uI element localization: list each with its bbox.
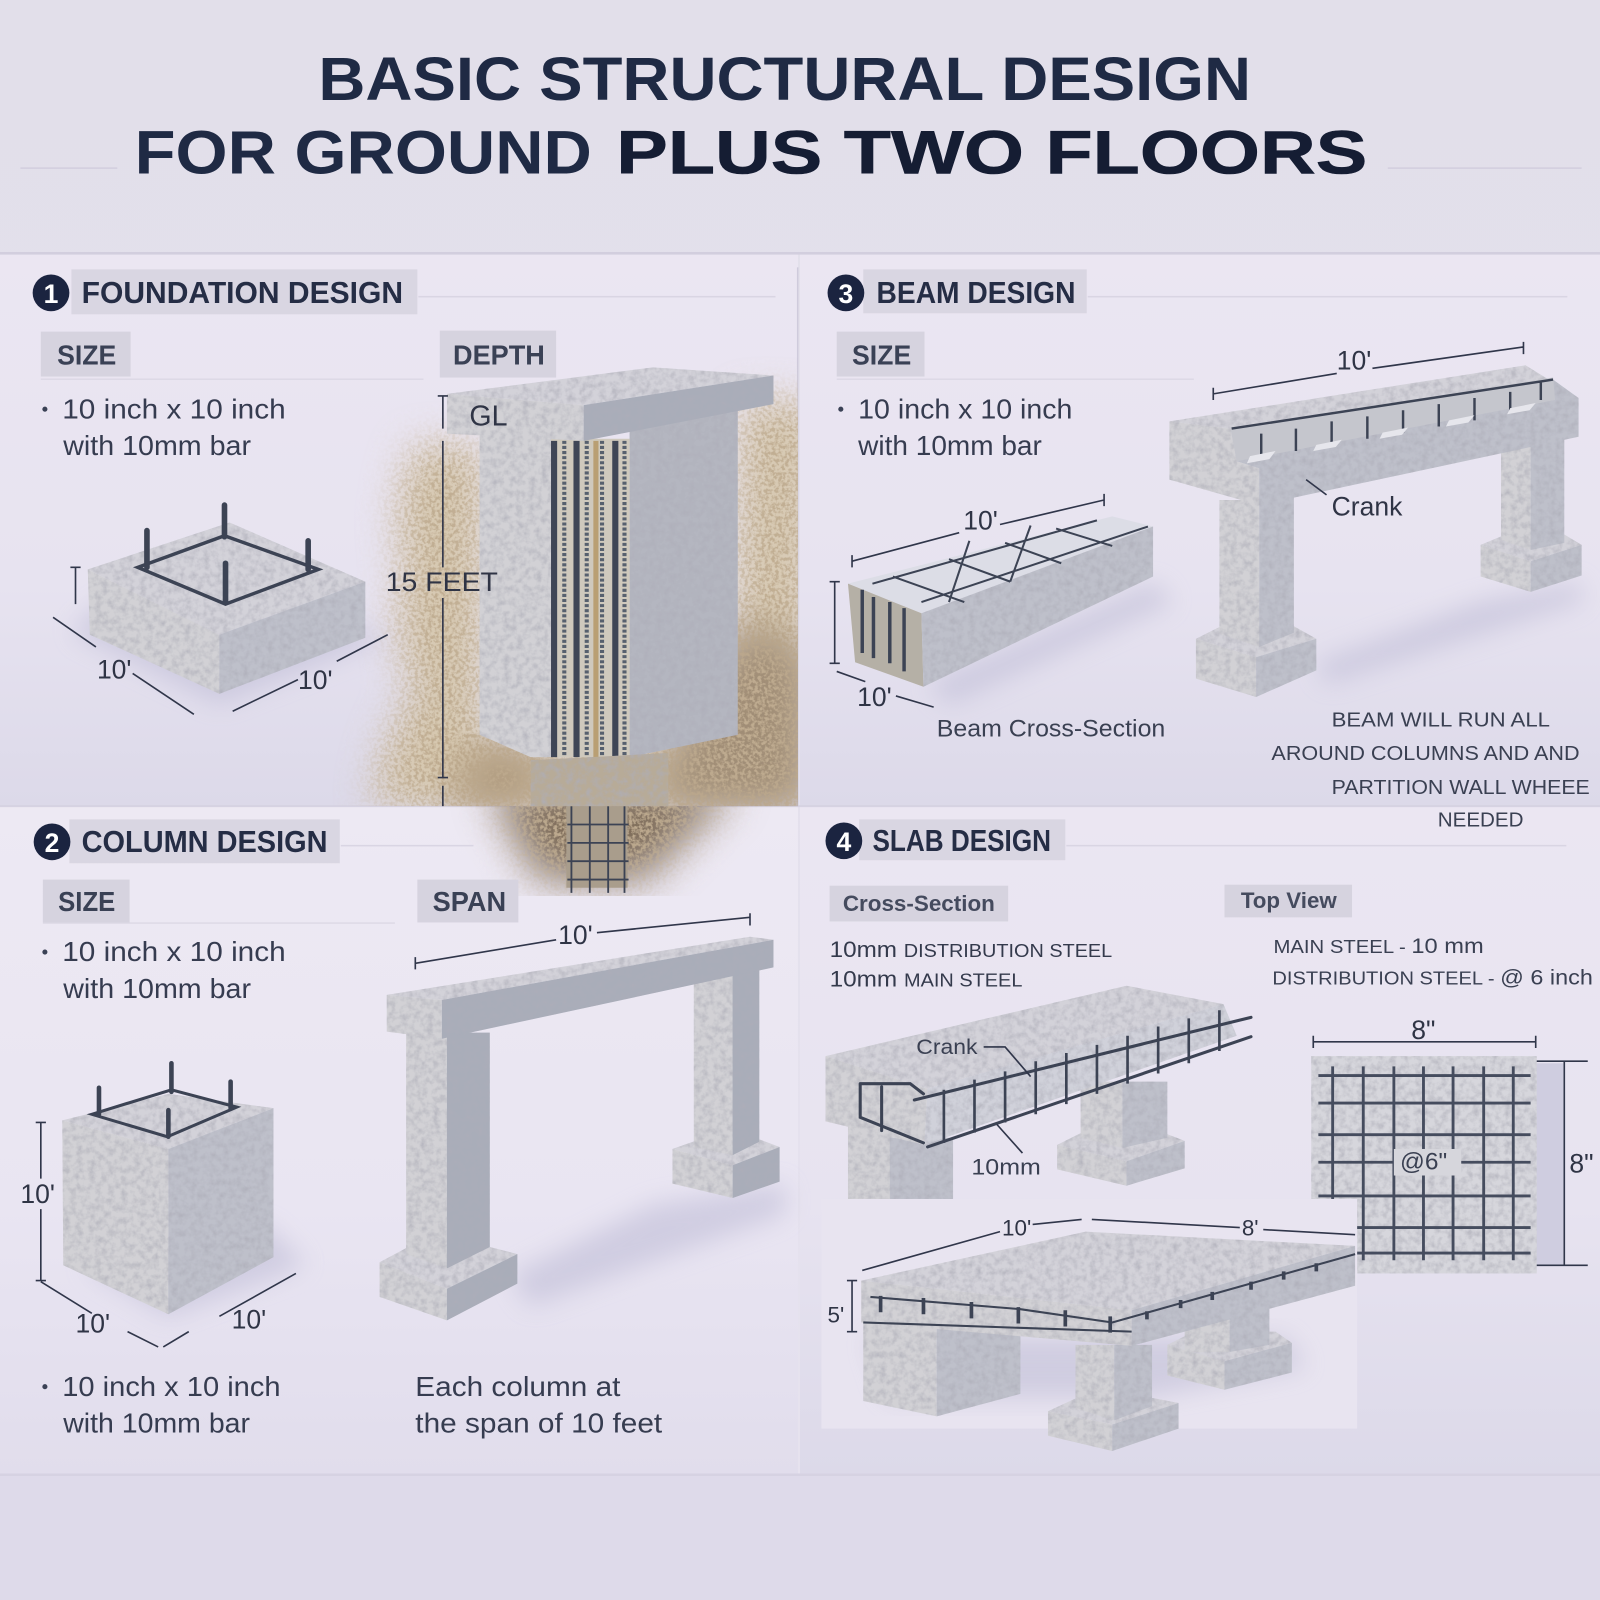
text: size spec <box>838 393 1072 461</box>
label: size: SIZE <box>58 886 115 917</box>
text: beam note: NEEDED <box>1438 810 1523 832</box>
label: size <box>43 880 395 924</box>
dimension: footing <box>53 567 388 714</box>
heading: beam design: BEAM DESIGN <box>877 276 1076 310</box>
text: beam note <box>1271 710 1590 832</box>
dimension: beam cross-section: 10' <box>857 682 892 712</box>
dimension: beam cross-section <box>830 494 1104 712</box>
dimension: column block: 10' <box>20 1179 55 1209</box>
text: beam note: BEAM WILL RUN ALL <box>1332 710 1550 732</box>
text: lower size spec: 10 inch x 10 inch <box>62 1371 281 1402</box>
text: top view spec: MAIN STEEL - 10 mm <box>1273 934 1484 958</box>
text: beam note: PARTITION WALL WHEEE <box>1332 777 1590 799</box>
text: size spec: with 10mm bar <box>62 973 251 1004</box>
heading: foundation design: 1 <box>44 279 59 309</box>
illustration: soil around column <box>378 403 816 806</box>
dimension: 15 feet depth: 15 FEET <box>386 567 498 597</box>
heading: beam design: 3 <box>839 279 853 309</box>
illustration: slab on columns <box>821 1199 1357 1451</box>
text: span note: Each column at <box>415 1371 621 1402</box>
illustration: beam frame <box>1169 365 1582 697</box>
dimension: beam span <box>1213 342 1523 521</box>
illustration: column in ground <box>447 367 773 806</box>
text: top view spec: DISTRIBUTION STEEL - @ 6 inch <box>1272 966 1593 990</box>
text: size spec <box>42 936 286 1004</box>
dimension: 15 feet depth <box>386 396 507 806</box>
dimension: beam cross-section: 10' <box>963 506 998 536</box>
text: size spec <box>42 393 286 461</box>
title: FOR GROUND <box>135 118 592 186</box>
label: cross-section: Cross-Section <box>843 891 995 916</box>
text: size spec: 10 inch x 10 inch <box>858 393 1072 424</box>
title: PLUS TWO FLOORS <box>616 118 1367 186</box>
heading: slab design: 4 <box>837 827 852 857</box>
dimension: beam span: 10' <box>1337 345 1371 375</box>
label: depth <box>440 331 556 378</box>
illustration: slab cross-section <box>826 986 1251 1199</box>
text: cross-section spec <box>830 937 1112 992</box>
heading: column design: COLUMN DESIGN <box>82 825 328 859</box>
title: BASIC STRUCTURAL DESIGN <box>318 45 1251 113</box>
label: span <box>417 880 518 922</box>
dimension: slab: 8' <box>1242 1216 1259 1241</box>
dimension: 15 feet depth: GL <box>469 401 507 433</box>
heading: foundation design: FOUNDATION DESIGN <box>82 276 403 310</box>
label: size: SIZE <box>852 339 911 370</box>
illustration: slab cross-section: 10mm <box>971 1154 1041 1179</box>
dimension: span <box>415 913 750 969</box>
dimension: column block: 10' <box>76 1309 110 1339</box>
illustration: reinforcement grid top view: @6" <box>1400 1148 1447 1175</box>
label: top view <box>1224 885 1352 917</box>
illustration: reinforcement grid top view: 8" <box>1411 1015 1435 1045</box>
heading: slab design <box>826 819 1566 860</box>
illustration: reinforcement grid top view: 8" <box>1569 1148 1594 1178</box>
heading: beam design <box>828 269 1567 313</box>
text: size spec: 10 inch x 10 inch <box>62 936 286 967</box>
text: span note <box>415 1371 663 1439</box>
label: depth: DEPTH <box>453 339 545 370</box>
text: span note: the span of 10 feet <box>415 1408 663 1439</box>
dimension: span: 10' <box>558 920 593 950</box>
panel: beam design <box>828 269 1590 832</box>
heading: slab design: SLAB DESIGN <box>872 824 1051 858</box>
text: cross-section spec: 10mm MAIN STEEL <box>830 967 1022 992</box>
heading: column design <box>34 819 473 863</box>
text: beam note: AROUND COLUMNS AND AND <box>1271 743 1580 765</box>
text: cross-section spec: 10mm DISTRIBUTION STEEL <box>830 937 1112 962</box>
heading: column design: 2 <box>45 828 59 858</box>
illustration: soil below panel edge <box>490 786 735 893</box>
dimension: slab <box>828 1216 1355 1332</box>
label: size <box>41 332 423 380</box>
dimension: slab: 10' <box>1002 1216 1031 1241</box>
text: size spec: with 10mm bar <box>857 430 1042 461</box>
illustration: column frame <box>380 937 786 1320</box>
panel: slab design <box>821 819 1594 1451</box>
label: span: SPAN <box>433 886 506 917</box>
text: lower size spec <box>42 1371 281 1439</box>
dimension: column block <box>20 1122 296 1347</box>
illustration: column block <box>62 1063 306 1316</box>
illustration: reinforcement grid top view <box>1311 1015 1594 1273</box>
dimension: footing: 10' <box>298 665 333 695</box>
title <box>135 45 1367 186</box>
illustration: slab cross-section: Crank <box>916 1035 978 1059</box>
label: size <box>837 332 1194 380</box>
dimension: beam span: Crank <box>1332 491 1403 521</box>
label: top view: Top View <box>1241 888 1337 913</box>
label: size: SIZE <box>57 339 116 370</box>
heading: foundation design <box>33 269 776 314</box>
text: size spec: 10 inch x 10 inch <box>62 393 286 424</box>
text: lower size spec: with 10mm bar <box>62 1408 250 1439</box>
panel: foundation design <box>33 269 816 893</box>
text: size spec: with 10mm bar <box>62 430 251 461</box>
dimension: footing: 10' <box>97 655 132 685</box>
label: cross-section <box>830 886 1008 921</box>
dimension: slab: 5' <box>828 1302 844 1327</box>
panel: column design <box>20 819 786 1439</box>
dimension: column block: 10' <box>232 1305 266 1335</box>
text: top view spec <box>1272 934 1593 990</box>
illustration: footing with bars <box>71 505 388 704</box>
text: beam cross-section label: Beam Cross-Section <box>937 716 1165 743</box>
illustration: beam cross-section <box>848 516 1173 704</box>
